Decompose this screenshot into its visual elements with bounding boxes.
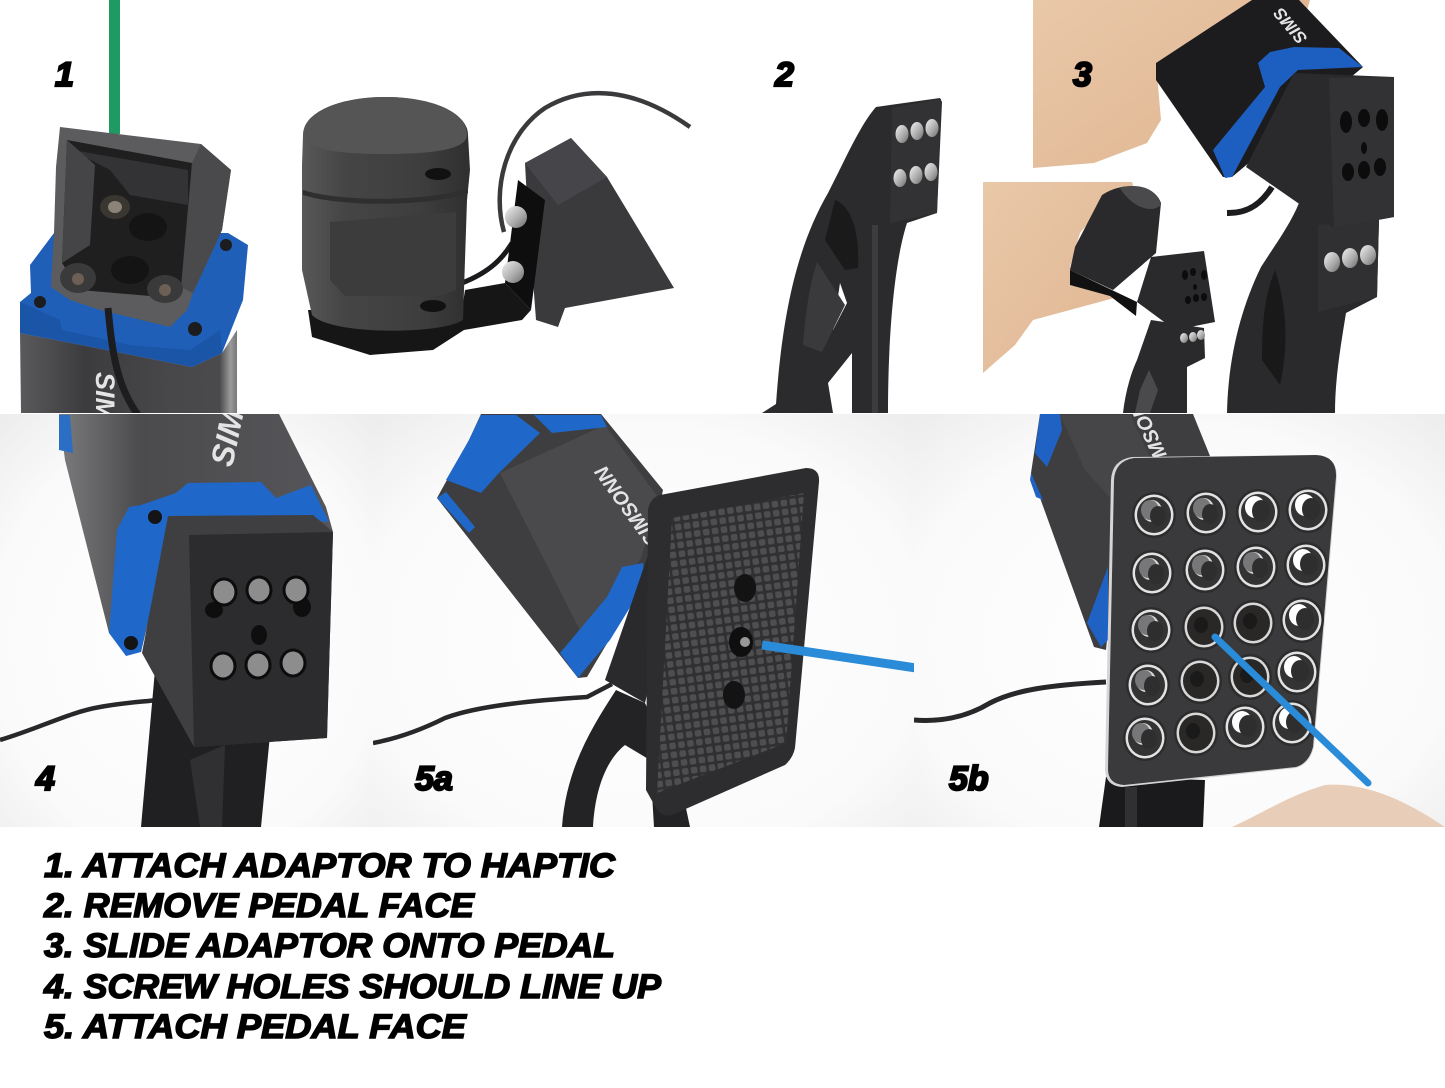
label 1: 1	[55, 56, 74, 94]
inset pedal	[1123, 320, 1205, 413]
label 4: 4	[35, 760, 55, 798]
face screw holes	[723, 574, 756, 709]
cable	[1226, 187, 1272, 213]
inset adaptor block	[1137, 251, 1215, 330]
haptic body	[1156, 0, 1363, 177]
row 1	[1132, 487, 1330, 538]
inset bolts	[1180, 330, 1205, 343]
head bolts	[894, 119, 938, 187]
haptic body	[1031, 414, 1210, 650]
cable	[914, 682, 1106, 720]
pedal arm	[762, 98, 942, 413]
label 5b: 5b	[949, 760, 989, 798]
photo 1: adaptor screwed onto haptic	[20, 0, 248, 438]
row 3	[1129, 597, 1324, 653]
logo: SIMSONN	[591, 461, 664, 550]
label 5a: 5a	[415, 760, 453, 798]
adaptor block	[1246, 73, 1394, 228]
blue end caps	[437, 415, 645, 678]
row 2	[1130, 542, 1328, 596]
inset background	[1226, 210, 1227, 216]
blue end caps	[1030, 414, 1108, 647]
green screwdriver	[109, 0, 120, 134]
photo 3 inset: hand holding the haptic over the pedal	[983, 181, 1227, 413]
photo: haptic unit with adaptor	[302, 93, 690, 355]
blue end cap	[59, 415, 329, 656]
logo on haptic: SIMS	[90, 372, 120, 438]
label 2: 2	[774, 56, 794, 94]
step 1: 1. ATTACH ADAPTOR TO HAPTIC	[44, 847, 615, 885]
pedal face outer	[646, 468, 819, 816]
cable	[373, 684, 612, 743]
adaptor block	[142, 515, 333, 747]
lower pedal	[1227, 203, 1379, 413]
step 4: 4. SCREW HOLES SHOULD LINE UP	[43, 968, 661, 1006]
block under the face	[605, 555, 670, 703]
step 2: 2. REMOVE PEDAL FACE	[43, 887, 475, 925]
label 3: 3	[1073, 56, 1092, 94]
photo 5b: attaching the hole-pattern pedal face	[914, 385, 1445, 827]
arm cut-outs	[803, 200, 878, 413]
hole-pattern plate	[1105, 455, 1337, 787]
step 5: 5. ATTACH PEDAL FACE	[44, 1008, 467, 1046]
blue end cap	[20, 233, 248, 367]
haptic body	[59, 414, 333, 652]
blue end cap	[1213, 47, 1363, 178]
background	[0, 414, 373, 827]
pedal arm	[1099, 777, 1205, 827]
pedal head face	[890, 99, 941, 223]
haptic body	[437, 414, 663, 678]
lower pedal bolts	[1324, 245, 1376, 272]
logo: SIMSONN	[1120, 385, 1180, 479]
pedal face textured grid	[657, 493, 804, 793]
bolt holes	[205, 577, 311, 679]
cable	[0, 700, 158, 740]
inset haptic	[1070, 186, 1161, 316]
wedge adaptor	[525, 138, 674, 327]
wrist	[1033, 0, 1262, 168]
logo on haptic: SIMS	[1269, 3, 1311, 48]
background	[373, 414, 914, 827]
blue driver	[762, 645, 916, 668]
mounting plate base	[308, 283, 531, 355]
row 4	[1126, 649, 1319, 708]
pedal arm	[562, 690, 690, 827]
blue driver	[1215, 637, 1368, 783]
adaptor cable	[500, 93, 690, 232]
pedal arm	[141, 670, 270, 827]
photo 5a: attaching the textured pedal face	[373, 414, 916, 827]
fingertip	[1232, 785, 1445, 827]
photo 3: sliding the adaptor onto the pedal, close-up	[1033, 0, 1394, 413]
photo 4: screw holes lined up	[0, 385, 373, 827]
logo: SIMS	[204, 385, 255, 469]
step instructions list	[43, 847, 661, 1046]
cable	[108, 308, 138, 415]
cylinder body	[302, 97, 470, 331]
hand	[983, 182, 1135, 373]
bracket with nuts	[505, 180, 545, 310]
background	[914, 414, 1445, 827]
haptic body	[20, 330, 237, 413]
row 5	[1123, 700, 1314, 761]
adaptor shell	[51, 127, 231, 327]
cylinder cap	[305, 97, 467, 154]
step 3: 3. SLIDE ADAPTOR ONTO PEDAL	[44, 927, 615, 965]
photo 2: pedal with face removed	[762, 98, 942, 413]
